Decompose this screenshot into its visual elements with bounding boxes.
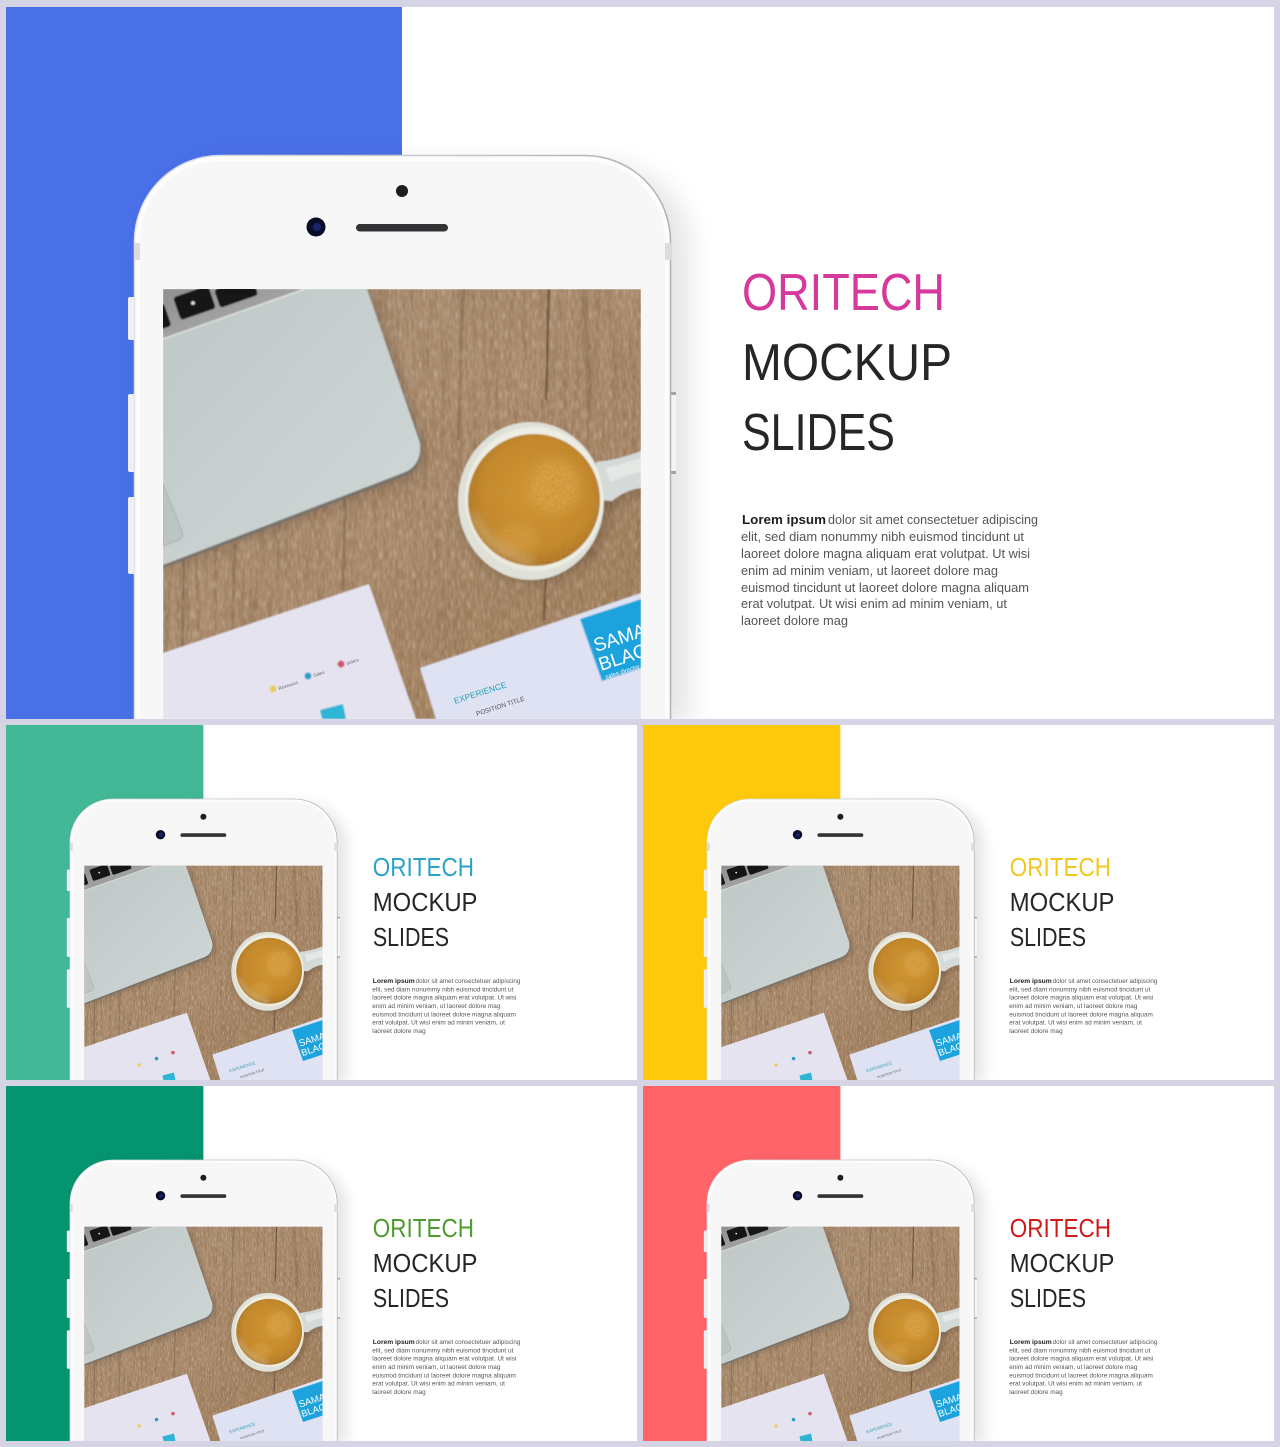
panel: blue [6,7,402,719]
body text: elit, sed diam nonummy nibh euismod tincidunt ut [1009,986,1151,993]
body text: laoreet dolore mag [372,1389,426,1396]
icon: phone mockup with photo [67,799,347,1083]
body text: laoreet dolore magna aliquam erat volutpat. Ut wisi [372,1356,516,1363]
title: ORITECH [373,854,474,882]
body text: laoreet dolore magna aliquam erat volutpat. Ut wisi [1009,995,1153,1002]
panel: yellow [643,725,840,1080]
body text: dolor sit amet consectetuer adipiscing [1053,978,1158,985]
body text: Lorem ipsum [373,1339,415,1346]
body text: enim ad minim veniam, ut laoreet dolore mag [1009,1364,1138,1371]
body text: Lorem ipsum [1010,978,1052,985]
title: SLIDES [1010,924,1086,952]
paper text in photo: POSITION TITLE [877,1068,903,1079]
icon: phone mockup with photo [704,799,984,1083]
paper text in photo: POSITION TITLE [240,1429,266,1440]
paper text in photo: Revenues [278,680,299,691]
body text: elit, sed diam nonummy nibh euismod tincidunt ut [741,529,1024,544]
paper text in photo: EXPERIENCE [453,679,508,706]
paper text in photo: EXPERIENCE [229,1060,256,1073]
title [374,1218,476,1308]
paper text in photo: BLAC [937,1041,964,1059]
body text: laoreet dolore mag [372,1028,426,1035]
title: MOCKUP [1010,889,1114,917]
paper text in photo: SAMA [298,1030,327,1049]
icon: phone mockup with photo [704,1160,984,1444]
body text: laoreet dolore magna aliquam erat volutpat. Ut wisi [1009,1356,1153,1363]
body text: enim ad minim veniam, ut laoreet dolore mag [741,563,998,578]
paper text in photo [278,620,650,718]
body text: elit, sed diam nonummy nibh euismod tincidunt ut [372,1347,514,1354]
title: MOCKUP [742,334,952,392]
title: MOCKUP [373,889,477,917]
body text: erat volutpat. Ut wisi enim ad minim veniam, ut [1009,1020,1142,1027]
body text: laoreet dolore magna aliquam erat volutpat. Ut wisi [741,546,1030,561]
paper text in photo: orders [346,657,360,666]
body text [1009,978,1158,1035]
paper text in photo [866,1032,960,1078]
paper text in photo: BLAC [300,1402,327,1420]
body text: laoreet dolore magna aliquam erat volutpat. Ut wisi [372,995,516,1002]
icon: phone mockup with photo [128,156,690,725]
title: SLIDES [373,1285,449,1313]
body text: elit, sed diam nonummy nibh euismod tincidunt ut [1009,1347,1151,1354]
slide: small yellow [643,725,1275,1083]
paper text in photo: SAMA [935,1030,964,1049]
body text: erat volutpat. Ut wisi enim ad minim veniam, ut [741,596,1007,611]
title [1010,858,1114,946]
panel: dark green [6,1086,203,1441]
title: SLIDES [742,404,895,462]
body text: Lorem ipsum [373,978,415,985]
paper text in photo: EXPERIENCE [866,1421,893,1434]
body text: dolor sit amet consectetuer adipiscing [416,1339,521,1346]
body text: dolor sit amet consectetuer adipiscing [1053,1339,1158,1346]
body text: Lorem ipsum [1010,1339,1052,1346]
body text: laoreet dolore mag [1009,1028,1063,1035]
paper text in photo: SAMA [298,1391,327,1410]
body text [1009,1339,1158,1396]
title: ORITECH [1010,1215,1111,1243]
paper text in photo: sales director [605,664,641,681]
paper text in photo [229,1394,322,1440]
title [744,274,950,450]
body text: dolor sit amet consectetuer adipiscing [416,978,521,985]
panel: coral [643,1086,840,1441]
body text: Lorem ipsum [742,512,826,527]
body text [741,512,1038,628]
paper text in photo [229,1032,322,1078]
title: SLIDES [373,924,449,952]
body text: enim ad minim veniam, ut laoreet dolore mag [1009,1003,1138,1010]
paper text in photo: SAMA [935,1391,964,1410]
body text: erat volutpat. Ut wisi enim ad minim veniam, ut [372,1020,505,1027]
body text: enim ad minim veniam, ut laoreet dolore mag [372,1364,501,1371]
body text [372,1339,521,1396]
body text: erat volutpat. Ut wisi enim ad minim veniam, ut [372,1381,505,1388]
icon: phone mockup with photo [67,1160,347,1444]
slide: small coral [643,1086,1275,1444]
body text: euismod tincidunt ut laoreet dolore magna aliquam [1009,1373,1153,1380]
body text: euismod tincidunt ut laoreet dolore magna aliquam [1009,1012,1153,1019]
body text: euismod tincidunt ut laoreet dolore magna aliquam [372,1373,516,1380]
title [1010,1218,1114,1308]
body text: euismod tincidunt ut laoreet dolore magna aliquam [741,580,1029,595]
title: ORITECH [1010,854,1111,882]
title: ORITECH [373,1215,474,1243]
paper text in photo: POSITION TITLE [877,1429,903,1440]
title: ORITECH [742,264,945,322]
panel: green [6,725,203,1080]
body text: laoreet dolore mag [741,613,848,628]
title: MOCKUP [373,1250,477,1278]
body text: enim ad minim veniam, ut laoreet dolore mag [372,1003,501,1010]
slide: small green [6,725,638,1083]
body text: dolor sit amet consectetuer adipiscing [828,512,1038,527]
title [374,858,476,946]
paper text in photo: EXPERIENCE [229,1421,256,1434]
paper text in photo: BLAC [596,640,650,676]
paper text in photo [866,1394,960,1440]
paper text in photo: SAMA [591,620,649,657]
body text: erat volutpat. Ut wisi enim ad minim veniam, ut [1009,1381,1142,1388]
paper text in photo: EXPERIENCE [866,1060,893,1073]
slide: large blue [6,7,1274,725]
body text: elit, sed diam nonummy nibh euismod tincidunt ut [372,986,514,993]
body text: euismod tincidunt ut laoreet dolore magna aliquam [372,1012,516,1019]
body text: laoreet dolore mag [1009,1389,1063,1396]
title: MOCKUP [1010,1250,1114,1278]
slide: small dark green [6,1086,638,1444]
title: SLIDES [1010,1285,1086,1313]
paper text in photo: POSITION TITLE [240,1068,266,1079]
paper text in photo: Sales [313,669,326,678]
paper text in photo: BLAC [937,1402,964,1420]
paper text in photo: POSITION TITLE [475,695,526,718]
paper text in photo: BLAC [300,1041,327,1059]
body text [372,978,521,1035]
